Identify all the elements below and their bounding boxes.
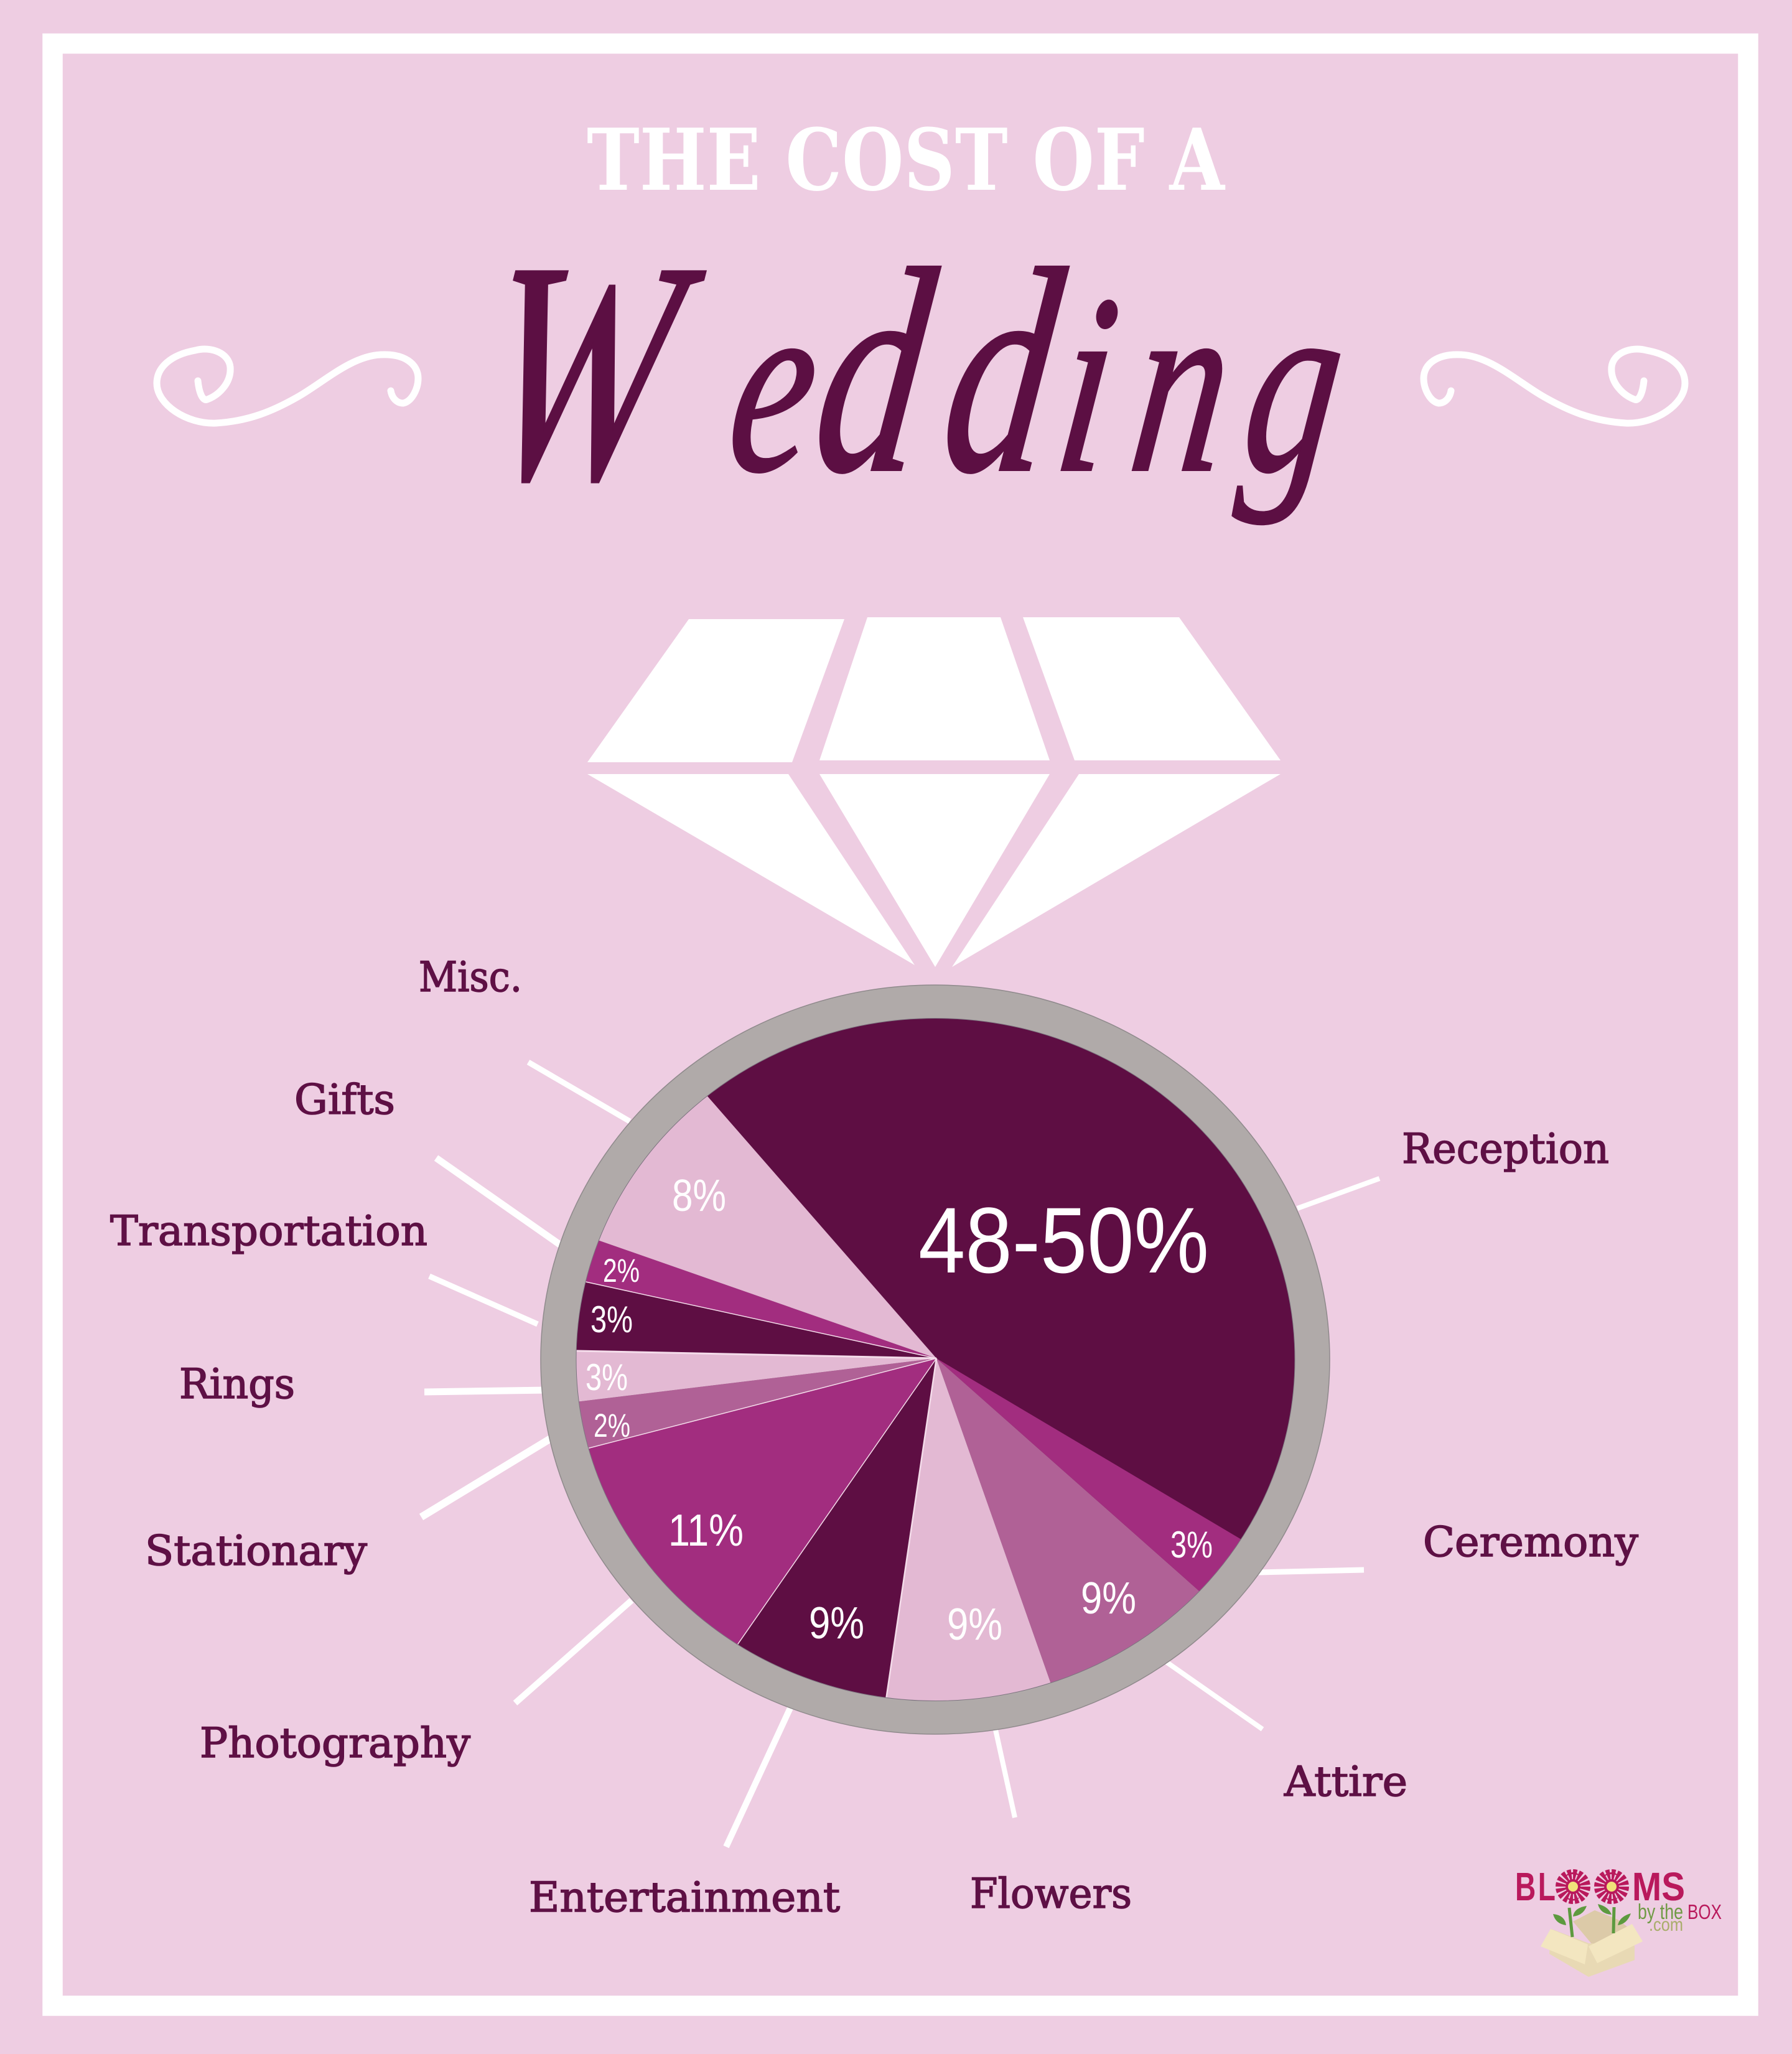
slice: stationary [579,1359,932,1447]
title: wedding: ing [1044,243,1359,526]
category labels: Transportation [110,1207,427,1255]
percentages [586,1171,1213,1650]
category labels: Ceremony [1423,1518,1639,1566]
slice: entertainment [687,1358,936,1784]
percentages: 9% [809,1599,864,1648]
slice: reception [653,933,1431,1582]
category labels: Gifts [294,1076,395,1124]
logo word: MS [1632,1864,1685,1909]
logo by the: by the [1638,1900,1683,1924]
slice: ceremony [937,1359,1241,1591]
title: wedding: W [465,197,718,546]
title: wedding: e [716,243,834,525]
slice: transportation [485,1263,936,1358]
percentages: 3% [1170,1524,1213,1566]
slice: flowers [887,1360,1050,1701]
category labels: Stationary [145,1527,368,1575]
slice: photography [589,1359,935,1644]
logo: blooms by the box [1515,1864,1722,1977]
category labels: Rings [179,1360,295,1408]
percentages: 8% [672,1171,726,1221]
percentages: 3% [586,1356,628,1398]
slice: attire [937,1359,1199,1683]
logo dot com: .com [1649,1915,1683,1935]
leader lines [421,1062,1379,1847]
logo stems and leaves [1553,1904,1631,1937]
category labels: Entertainment [529,1874,840,1921]
category labels: Flowers [970,1870,1132,1918]
title: wedding: dd [801,210,1079,534]
percentages: 9% [947,1600,1002,1650]
percentages: 3% [590,1299,633,1340]
title: wedding [465,197,1365,546]
percentages: 2% [603,1253,640,1289]
pie inner edge [576,1018,1295,1701]
logo flowers [1561,1874,1624,1899]
pie chart [576,1019,1294,1701]
category labels: Reception [1402,1125,1609,1173]
category labels: Attire [1284,1758,1407,1806]
swirl right [1424,349,1685,423]
logo word: BLOO [1515,1865,1623,1909]
slice hairlines [576,1281,937,1697]
category labels: Misc. [419,953,522,1001]
logo box word: BOX [1687,1900,1722,1923]
slice: misc [599,1096,936,1358]
slice: gifts [586,1241,932,1357]
logo word [1515,1864,1685,1909]
percentages: 48-50% [918,1188,1209,1292]
slice: rings [576,1351,931,1401]
percentages: 2% [594,1407,630,1444]
percentages: 9% [1081,1574,1136,1623]
swirl left [157,349,418,423]
category labels [110,953,1639,1921]
diamond [587,617,1281,967]
ring [541,985,1330,1734]
category labels: Photography [200,1719,471,1767]
percentages: 11% [668,1506,744,1556]
logo box [1541,1910,1643,1977]
title: the cost of a: THE COST OF A [587,110,1225,210]
